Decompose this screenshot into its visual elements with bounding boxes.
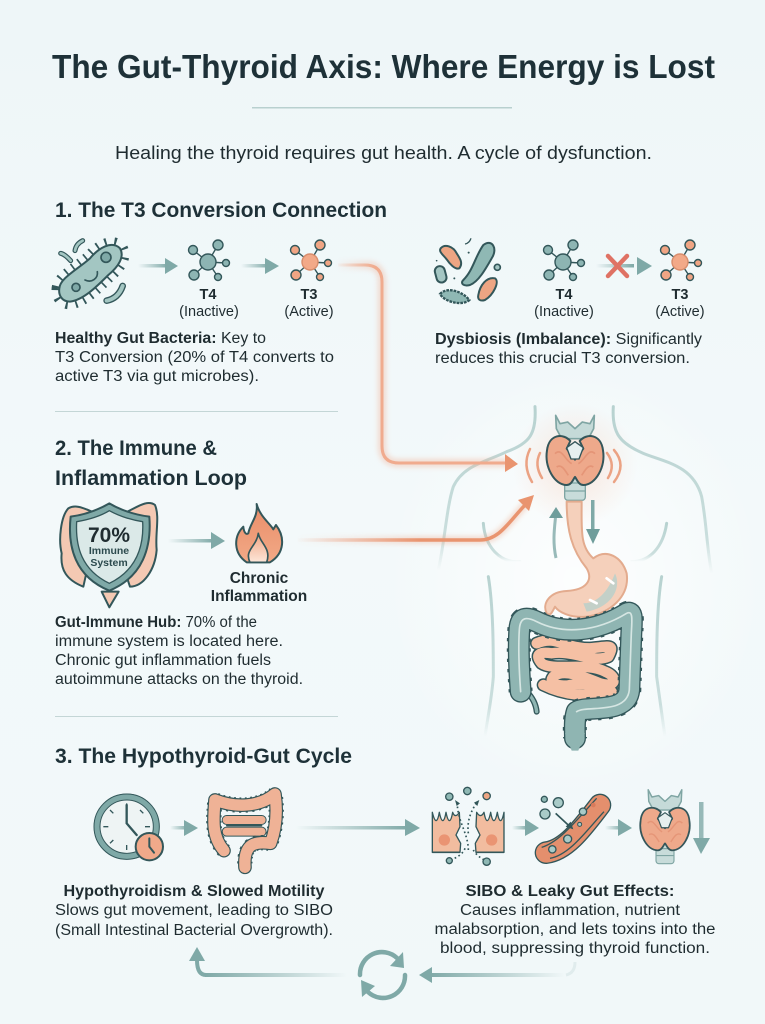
- text: hypothyroidism and slowed motility: Hypothyroidism & Slowed Motility: [64, 883, 325, 900]
- label: T4 inactive: (Inactive): [179, 304, 239, 320]
- icon: blood vessel with toxins: [540, 796, 604, 858]
- text: hypothyroidism and slowed motility: (Small Intestinal Bacterial Overgrowth).: [55, 922, 333, 939]
- label: chronic inflammation: Inflammation: [211, 588, 307, 605]
- connector: from inflammation to thyroid: [298, 495, 534, 540]
- label: shield 70 percent: Immune: [89, 545, 129, 557]
- text: dysbiosis: Dysbiosis (Imbalance): Significantly: [435, 331, 702, 348]
- text: gut-immune hub: autoimmune attacks on the thyroid.: [55, 671, 303, 688]
- icon: dysbiosis bacteria: [434, 238, 500, 303]
- arrow: gut to inflammation: [168, 532, 225, 549]
- signal arcs around thyroid: [526, 449, 620, 482]
- feedback arrows: [549, 500, 600, 558]
- arrow: blood to thyroid: [605, 819, 632, 836]
- text: hypothyroidism and slowed motility: [55, 883, 333, 939]
- arrow: clock to colon: [170, 820, 198, 836]
- label: chronic inflammation: Chronic: [230, 570, 289, 587]
- label: T3 active dysbiosis: (Active): [655, 304, 705, 320]
- label: T4 inactive dysbiosis: [534, 287, 594, 320]
- text: dysbiosis: reduces this crucial T3 conversion.: [435, 350, 690, 367]
- text: gut-immune hub: Gut-Immune Hub: 70% of the: [55, 614, 257, 631]
- text: SIBO and leaky gut effects: Causes inflammation, nutrient: [460, 902, 681, 919]
- text: SIBO and leaky gut effects: malabsorption, and lets toxins into the: [434, 921, 716, 938]
- icon: small thyroid: [640, 790, 690, 864]
- label: T3 active: (Active): [284, 304, 334, 320]
- text: healthy gut bacteria: Healthy Gut Bacteria: Key to: [55, 330, 266, 347]
- heading: section 2: Inflammation Loop: [55, 467, 247, 490]
- text: healthy gut bacteria: T3 Conversion (20% of T4 converts to: [55, 349, 334, 366]
- subtitle: Healing the thyroid requires gut health. A cycle of dysfunction.: [115, 143, 652, 163]
- arrow: colon to leaky gut: [296, 819, 420, 836]
- text: gut-immune hub: [55, 614, 303, 688]
- arrow: leaky gut to blood: [512, 819, 539, 836]
- heading: section 2: 2. The Immune &: [55, 437, 217, 460]
- label: T3 active dysbiosis: T3: [672, 287, 688, 303]
- icon: clock: [94, 794, 163, 860]
- label: T4 inactive: [179, 287, 239, 320]
- text: healthy gut bacteria: [55, 330, 334, 385]
- text: gut-immune hub: Chronic gut inflammation fuels: [55, 652, 271, 669]
- label: chronic inflammation: [211, 570, 307, 605]
- text: healthy gut bacteria: active T3 via gut microbes).: [55, 368, 259, 385]
- text: SIBO and leaky gut effects: blood, suppressing thyroid function.: [440, 940, 710, 957]
- panel: section 3 hypothyroid gut cycle: [55, 745, 716, 998]
- label: shield 70 percent: System: [90, 557, 128, 569]
- body outline: [438, 407, 712, 737]
- heading: section 1: 1. The T3 Conversion Connection: [55, 199, 387, 222]
- icon: T4 molecule: [188, 240, 230, 280]
- arrow: effects feed back into cycle: [419, 962, 575, 983]
- icon: leaky gut: [432, 787, 504, 865]
- esophagus and stomach: [545, 502, 627, 617]
- text: SIBO and leaky gut effects: SIBO & Leaky Gut Effects:: [466, 883, 674, 900]
- label: T3 active dysbiosis: [655, 287, 705, 320]
- icon: flame: [236, 504, 282, 562]
- arrow: blocked conversion: [596, 256, 652, 276]
- icon: shield with gut: [60, 503, 157, 607]
- label: shield 70 percent: [88, 524, 130, 569]
- connector: from T3 to thyroid: [338, 265, 518, 472]
- arrow: T4 to T3: [241, 258, 279, 274]
- label: T3 active: [284, 287, 334, 320]
- icon: T3 molecule dysbiosis: [660, 240, 702, 280]
- icon: slowed colon: [214, 794, 276, 867]
- title: The Gut-Thyroid Axis: Where Energy is Lost: [52, 48, 715, 85]
- heading: section 3: 3. The Hypothyroid-Gut Cycle: [55, 745, 352, 768]
- text: hypothyroidism and slowed motility: Slows gut movement, leading to SIBO: [55, 902, 333, 919]
- label: T4 inactive dysbiosis: (Inactive): [534, 304, 594, 320]
- label: T4 inactive: T4: [200, 287, 216, 303]
- panel: section 2 immune loop: [55, 437, 307, 688]
- arrow: bacteria to T4: [138, 258, 178, 274]
- icon: thyroid gland: [547, 415, 603, 500]
- arrow: suppressed function: [693, 802, 710, 854]
- large intestine: [519, 613, 632, 751]
- arrow: return to hypothyroidism: [189, 947, 347, 977]
- small intestine: [537, 641, 614, 695]
- label: T4 inactive dysbiosis: T4: [556, 287, 572, 303]
- text: gut-immune hub: immune system is located here.: [55, 633, 283, 650]
- label: T3 active: T3: [301, 287, 317, 303]
- icon: T4 molecule dysbiosis: [544, 240, 584, 280]
- text: dysbiosis: [435, 331, 702, 367]
- icon: healthy gut bacteria: [59, 241, 123, 302]
- heading: section 2: [55, 437, 247, 490]
- icon: T3 molecule: [290, 240, 332, 280]
- label: shield 70 percent: 70%: [88, 524, 130, 547]
- text: SIBO and leaky gut effects: [434, 883, 716, 957]
- icon: digestive organs: [519, 502, 632, 751]
- panel: section 1 T3 conversion: [55, 199, 705, 385]
- icon: cycle arrows: [360, 952, 405, 998]
- illustration: torso with thyroid and gut: [298, 265, 765, 800]
